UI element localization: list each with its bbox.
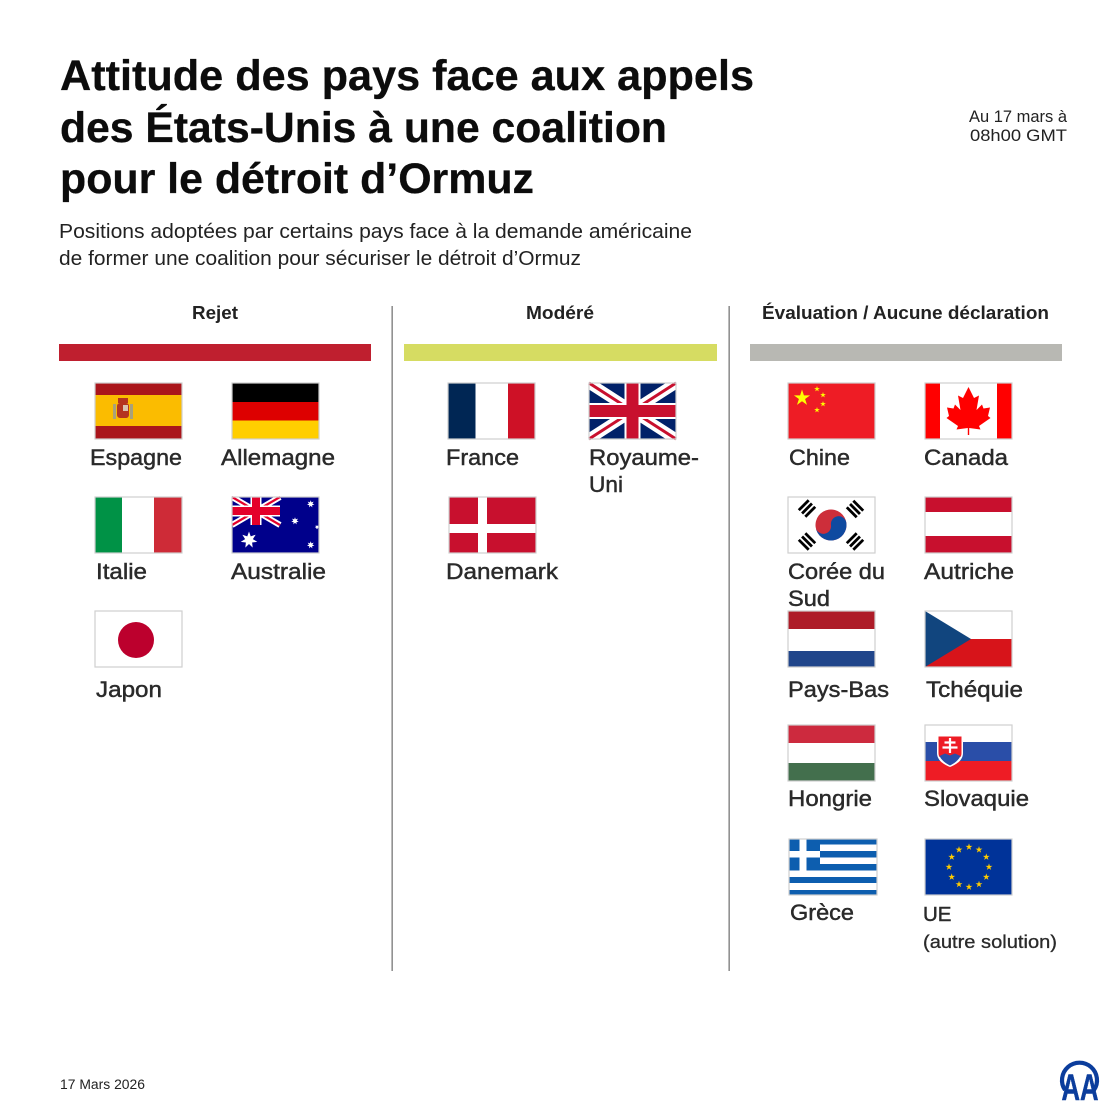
title [60,52,754,203]
label: UE [923,903,1057,952]
heading: Rejet: Rejet [192,303,238,323]
flag: Danemark [449,497,536,553]
date note: Au 17 mars à [969,107,1068,126]
label: Grèce: Grèce [790,900,854,925]
label: Royaume-Uni: Royaume- [589,445,699,470]
label: Danemark: Danemark [446,559,559,584]
date note [969,107,1068,145]
panel: Rejet [59,303,371,702]
label: Italie: Italie [96,559,147,584]
icon: AA logo [1062,1063,1098,1108]
label: Corée du Sud [788,559,885,611]
icon: AA logo: AA [1062,1067,1098,1108]
flag: Grèce [789,839,877,895]
flag: Australie [232,497,319,553]
title: des États-Unis à une coalition [60,104,667,152]
subtitle: Positions adoptées par certains pays face à la demande américaine [59,221,692,243]
label: Autriche: Autriche [924,559,1014,584]
label: Royaume-Uni: Uni [589,472,623,497]
label: Royaume-Uni [589,445,699,497]
footer date: 17 Mars 2026 [60,1077,145,1092]
label: UE: (autre solution) [923,932,1057,952]
label: Canada: Canada [924,445,1009,470]
flag: Chine [788,383,875,439]
subtitle: de former une coalition pour sécuriser le détroit d’Ormuz [59,248,581,270]
bar: Modéré [404,344,717,361]
label: Espagne: Espagne [90,445,182,470]
flag: Canada [925,383,1012,439]
flag: Corée du Sud [788,497,875,553]
title: Attitude des pays face aux appels [60,52,754,100]
flag: Slovaquie [925,725,1012,781]
label: Slovaquie: Slovaquie [924,786,1029,811]
flag: Italie [95,497,182,553]
label: Chine: Chine [789,445,850,470]
title: pour le détroit d’Ormuz [60,155,534,203]
heading: Modéré: Modéré [526,303,594,323]
flag: Tchéquie [925,611,1012,667]
flag: Japon [95,611,182,667]
panel: Évaluation / Aucune déclaration [750,302,1062,952]
label: Hongrie: Hongrie [788,786,872,811]
column divider right [728,306,730,971]
flag: Pays-Bas [788,611,875,667]
bar: Rejet [59,344,371,361]
label: Corée du Sud: Sud [788,586,830,611]
label: UE: UE [923,903,951,926]
flag: Espagne [95,383,182,439]
flag: Autriche [925,497,1012,553]
label: Japon: Japon [96,677,162,702]
heading: Évaluation / Aucune déclaration: Évaluation / Aucune déclaration [762,302,1049,323]
flag: France [448,383,535,439]
flag: Allemagne [232,383,319,439]
label: Allemagne: Allemagne [221,445,335,470]
column divider left [392,306,393,971]
label: Corée du Sud: Corée du [788,559,885,584]
flag: Royaume-Uni [589,383,676,439]
flag: Hongrie [788,725,875,781]
label: France: France [446,445,519,470]
flag: UE [925,839,1012,895]
label: Australie: Australie [231,559,326,584]
subtitle [59,221,692,270]
label: Pays-Bas: Pays-Bas [788,677,889,702]
panel: Modéré [404,303,717,584]
date note: 08h00 GMT [970,126,1067,145]
bar: Évaluation [750,344,1062,361]
label: Tchéquie: Tchéquie [926,677,1023,702]
